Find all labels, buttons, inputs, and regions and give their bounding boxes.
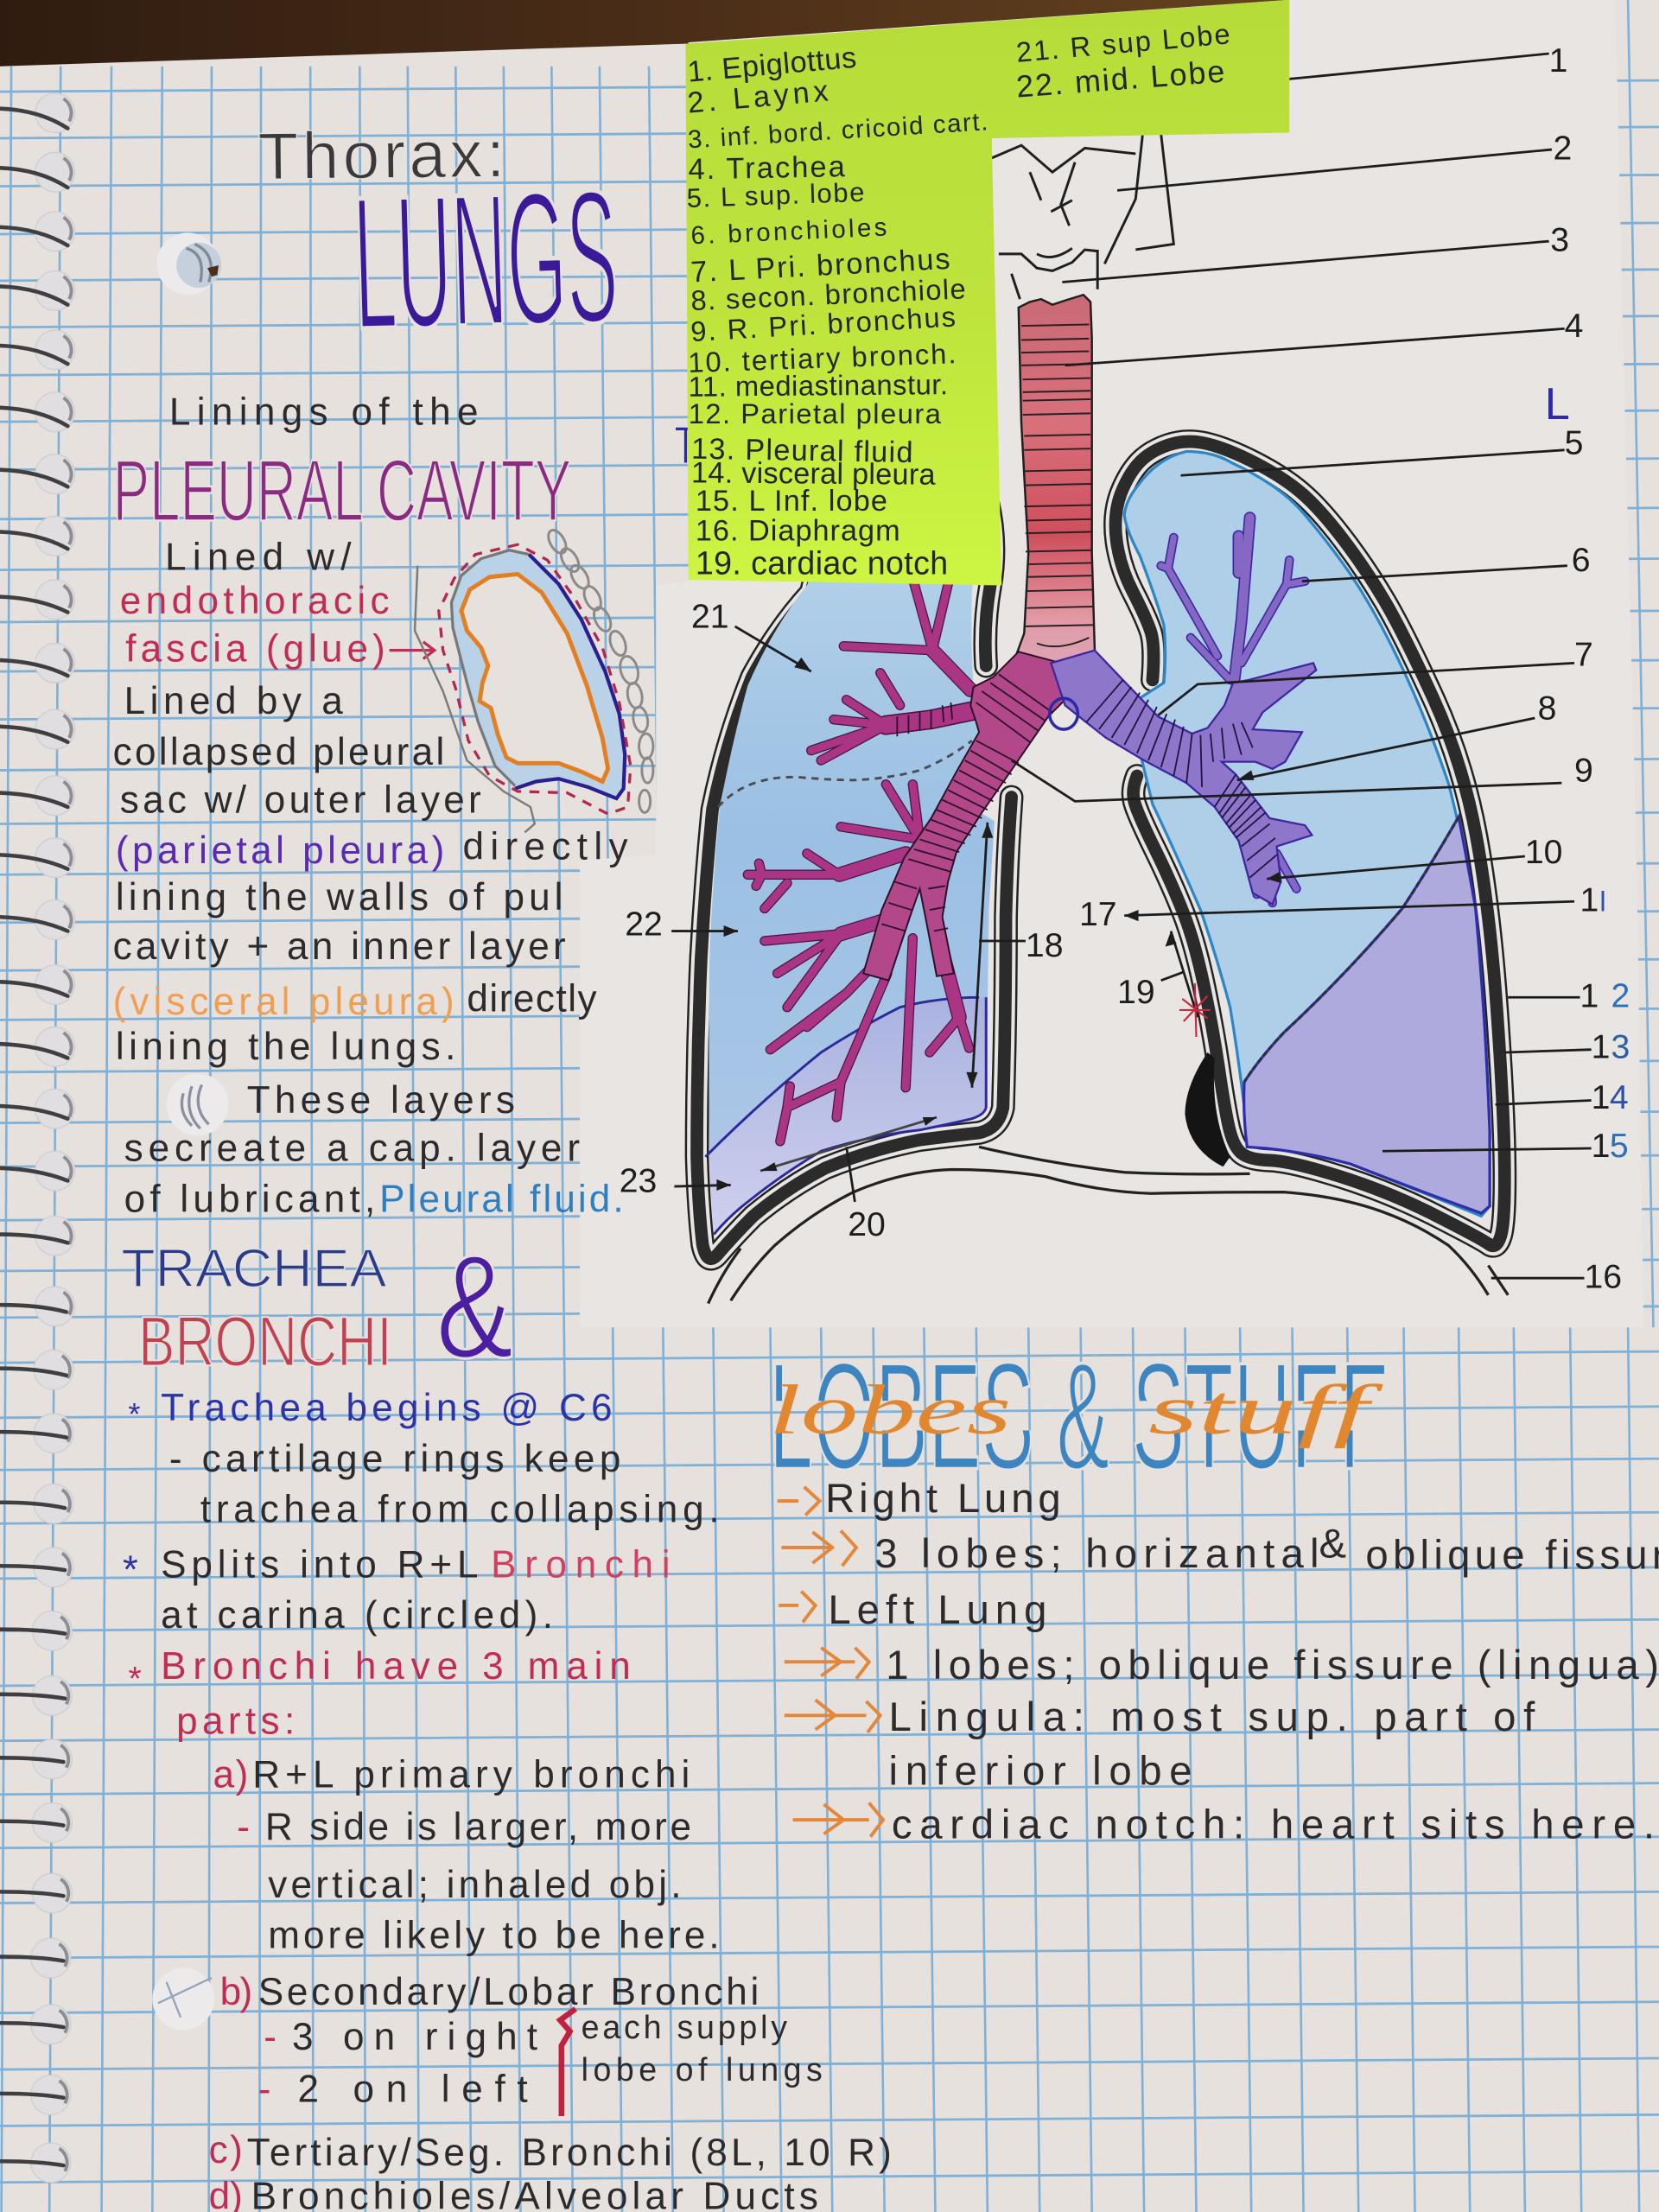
purple bronchial tree <box>1051 518 1316 905</box>
diagram numbers: 4 <box>1610 1079 1629 1116</box>
text block: lobes notes: & <box>1319 1521 1346 1567</box>
text block: pleural cavity notes: (parietal pleura) <box>116 830 444 872</box>
left-side pleural band <box>697 430 1012 1259</box>
sticky note labels: 3. inf. bord. cricoid cart. <box>687 107 988 154</box>
sticky note labels: 10. tertiary bronch. <box>688 337 957 378</box>
heading: Linings of the: Linings of the <box>169 391 478 433</box>
pleural sac sketch <box>415 527 653 832</box>
diagram numbers: 1 <box>1580 882 1599 919</box>
text block: trachea and bronchi notes: * <box>129 1661 142 1698</box>
text block: lobes notes: 3 lobes; horizantal <box>874 1531 1319 1577</box>
sticky note labels: 16. Diaphragm <box>696 514 900 547</box>
text block: pleural cavity notes: cavity + an inner layer <box>113 925 566 968</box>
sticky note labels: 2. Laynx <box>686 74 830 120</box>
sticky note labels: 7. L Pri. bronchus <box>690 243 950 289</box>
orange cursive overlay: lobes <box>769 1370 1012 1449</box>
text block: trachea and bronchi notes: * <box>123 1548 138 1592</box>
diagram numbers: 2 <box>1554 130 1572 167</box>
arrow heads <box>716 658 1281 1191</box>
diagram numbers: 6 <box>1572 542 1591 579</box>
text block: pleural cavity notes: lining the walls of pul <box>116 876 563 918</box>
text block: trachea and bronchi notes: parts: <box>176 1700 295 1743</box>
text block: trachea and bronchi notes: Bronchi have 3 main <box>161 1645 631 1688</box>
handwritten mark beside sticky <box>676 429 690 463</box>
text block: lobes notes: 1 lobes; oblique fissure (lingua) <box>886 1643 1659 1688</box>
diagram numbers: 1 <box>1592 1028 1610 1065</box>
diagram numbers: 21 <box>691 599 729 636</box>
text block: pleural cavity notes: sac w/ outer layer <box>120 779 481 821</box>
sticky note labels: 1. Epiglottus <box>686 41 858 89</box>
text block: trachea and bronchi notes: lobe of lungs <box>582 2051 823 2088</box>
title: Thorax: Thorax: <box>257 118 505 194</box>
orange arrows <box>778 1487 883 1837</box>
right lung edge and oblique fissure <box>705 997 986 1235</box>
rib chain <box>544 527 653 812</box>
text block: trachea and bronchi notes: b) <box>220 1971 252 2013</box>
diagram numbers: 10 <box>1525 834 1562 871</box>
diagram sheet <box>580 0 1643 1327</box>
sticky note labels: 9. R. Pri. bronchus <box>690 300 957 347</box>
diagram numbers: 23 <box>620 1163 657 1200</box>
diagram numbers: 22 <box>625 906 663 943</box>
larynx line art <box>992 134 1173 299</box>
diagram numbers: 1 <box>1580 978 1599 1015</box>
sticky note labels: 13. Pleural fluid <box>691 433 913 469</box>
text block: pleural cavity notes: fascia (glue) <box>125 628 385 671</box>
text block: pleural cavity notes: Pleural fluid. <box>379 1178 624 1220</box>
text block: pleural cavity notes <box>113 537 628 1220</box>
horizontal fissure <box>718 741 972 807</box>
orange visceral layer <box>461 574 608 781</box>
text block: pleural cavity notes: Lined w/ <box>165 537 352 579</box>
text block: trachea and bronchi notes: at carina (circled). <box>161 1594 553 1637</box>
sticky note labels: 5. L sup. lobe <box>686 177 865 213</box>
diagram numbers: 16 <box>1584 1259 1622 1296</box>
text block: trachea and bronchi notes: trachea from collapsing. <box>200 1489 720 1531</box>
arrow: fascia to pleural sketch <box>390 642 435 658</box>
wooden table <box>0 0 1305 67</box>
text block: trachea and bronchi notes: more likely to be here. <box>268 1915 720 1957</box>
pink bronchus rings <box>881 674 1052 931</box>
text block: trachea and bronchi notes: - <box>258 2069 270 2111</box>
text: LUNGS <box>351 151 620 369</box>
text block: lobes notes <box>825 1476 1659 1847</box>
diagram numbers: 7 <box>1574 637 1593 674</box>
sticky note labels: 8. secon. bronchiole <box>690 272 966 316</box>
text block: pleural cavity notes: secreate a cap. layer <box>124 1128 580 1170</box>
grey inner outline <box>451 550 529 785</box>
sticky note labels: 15. L Inf. lobe <box>696 485 887 518</box>
diagram numbers: 9 <box>1574 752 1593 789</box>
text block: trachea and bronchi notes: Trachea begins @ C6 <box>161 1387 613 1429</box>
heart shadow <box>1185 1052 1230 1166</box>
diagram numbers: 5 <box>1610 1128 1629 1165</box>
text block: trachea and bronchi notes: 2 on left <box>297 2069 528 2111</box>
carina circle <box>1050 698 1077 729</box>
diagram numbers: 4 <box>1565 308 1583 345</box>
text block: trachea and bronchi notes: Secondary/Lobar Bronchi <box>258 1971 759 2013</box>
diagram numbers: 17 <box>1079 896 1117 933</box>
sticky note labels: 6. bronchioles <box>690 213 887 250</box>
text block: trachea and bronchi notes: Splits into R+L <box>161 1543 478 1586</box>
binder hole top <box>156 232 221 295</box>
sticky note labels <box>686 17 1231 581</box>
text block: pleural cavity notes: collapsed pleural <box>113 731 444 773</box>
text block: trachea and bronchi notes: - <box>264 2016 276 2058</box>
trachea rings <box>1021 325 1095 646</box>
text block: trachea and bronchi notes: Bronchi <box>491 1543 671 1586</box>
text block: pleural cavity notes: lining the lungs. <box>116 1026 455 1068</box>
text block: trachea and bronchi notes: c) <box>209 2129 243 2171</box>
lungs diagram <box>620 42 1630 1304</box>
handwritten L marker: L <box>1545 379 1570 429</box>
heading: Lobes and Stuff: stuff <box>1148 1370 1384 1449</box>
text block: lobes notes: Right Lung <box>825 1476 1061 1522</box>
text block: lobes notes: inferior lobe <box>889 1748 1192 1794</box>
text block: trachea and bronchi notes: * <box>129 1396 141 1432</box>
diagram numbers: l <box>1599 886 1606 918</box>
diagram numbers: 20 <box>848 1206 886 1243</box>
text block: trachea and bronchi notes: R side is larger, more <box>265 1806 691 1848</box>
right lower lobe <box>709 997 986 1235</box>
text block: trachea and bronchi notes: - <box>237 1806 250 1848</box>
diagram numbers: 3 <box>1611 1028 1630 1065</box>
sticky note labels: 11. mediastinanstur. <box>688 368 948 403</box>
text block: lobes notes: Left Lung <box>828 1587 1046 1633</box>
purple bronchus rings <box>1086 680 1277 878</box>
text block: trachea and bronchi notes: each supply <box>582 2009 787 2045</box>
diagram numbers: 2 <box>1611 978 1630 1015</box>
sticky note labels: 19. cardiac notch <box>696 544 948 581</box>
heading: Trachea: TRACHEA <box>121 1239 387 1299</box>
blue pleural fluid band <box>451 550 625 798</box>
trachea <box>1014 295 1095 702</box>
binder hole middle <box>167 1073 228 1135</box>
diagram numbers: 1 <box>1592 1079 1610 1116</box>
text block: lobes notes: cardiac notch: heart sits here. <box>892 1802 1655 1847</box>
diagram numbers <box>620 42 1630 1296</box>
diagram numbers: 5 <box>1565 425 1583 462</box>
sticky note labels: 4. Trachea <box>688 150 846 186</box>
spiral binding <box>0 93 75 2183</box>
diagram numbers: 3 <box>1550 222 1569 259</box>
diagram numbers: 8 <box>1538 690 1556 728</box>
sticky note labels: 12. Parietal pleura <box>689 397 942 429</box>
right lung fill (image left) <box>709 557 995 1235</box>
navy parietal layer <box>515 555 625 798</box>
diagram numbers: 1 <box>1549 42 1567 79</box>
sticky note sheet <box>685 0 1289 586</box>
text block: trachea and bronchi notes <box>123 1387 892 2212</box>
text block: trachea and bronchi notes: Tertiary/Seg. Bronchi (8L, 10 R) <box>247 2132 892 2174</box>
text block: trachea and bronchi notes: a) <box>213 1754 248 1796</box>
sticky note labels: 14. visceral pleura <box>691 456 937 492</box>
sticky note labels: 21. R sup Lobe <box>1015 17 1231 68</box>
cardiac notch star <box>1179 983 1211 1037</box>
sticky note labels: 22. mid. Lobe <box>1015 54 1226 105</box>
heading: Pleural Cavity: PLEURAL CAVITY <box>113 442 571 539</box>
text block: pleural cavity notes: These layers <box>247 1079 515 1122</box>
leader lines <box>671 54 1592 1278</box>
left lower lobe <box>1244 817 1490 1213</box>
text block: lobes notes: Lingula: most sup. part of <box>889 1694 1535 1740</box>
text block: pleural cavity notes: of lubricant, <box>124 1178 375 1220</box>
text block: pleural cavity notes: endothoracic <box>120 580 390 622</box>
text block: trachea and bronchi notes: R+L primary bronchi <box>252 1754 690 1796</box>
grey chest wall line <box>415 566 535 832</box>
diagram numbers: 19 <box>1117 974 1155 1011</box>
heading: Lobes and Stuff <box>774 1362 1384 1471</box>
text block: trachea and bronchi notes: 3 on right <box>292 2016 537 2058</box>
text block: pleural cavity notes: directly <box>463 825 628 868</box>
diaphragm lines <box>709 1147 1508 1304</box>
text block: pleural cavity notes: directly <box>467 978 597 1020</box>
right-side pleural band <box>1116 442 1504 1246</box>
text block: trachea and bronchi notes: - cartilage rings keep <box>169 1438 620 1480</box>
binder hole bottom <box>152 1968 214 2030</box>
red dashed endothoracic fascia <box>439 544 631 814</box>
red brace <box>560 2009 575 2116</box>
text block: pleural cavity notes: Lined by a <box>124 680 343 722</box>
heading: Bronchi: BRONCHI <box>138 1302 392 1381</box>
sticky note panel <box>685 0 1289 586</box>
diagram numbers: 18 <box>1026 927 1064 964</box>
text block: pleural cavity notes: (visceral pleura) <box>113 981 454 1023</box>
pink bronchial tree <box>747 578 1065 1141</box>
diagram numbers: 1 <box>1592 1128 1610 1165</box>
heading: ampersand: & <box>435 1224 513 1389</box>
text block: trachea and bronchi notes: vertical; inhaled obj. <box>268 1864 682 1906</box>
left lung fill (image right) <box>1124 451 1490 1216</box>
